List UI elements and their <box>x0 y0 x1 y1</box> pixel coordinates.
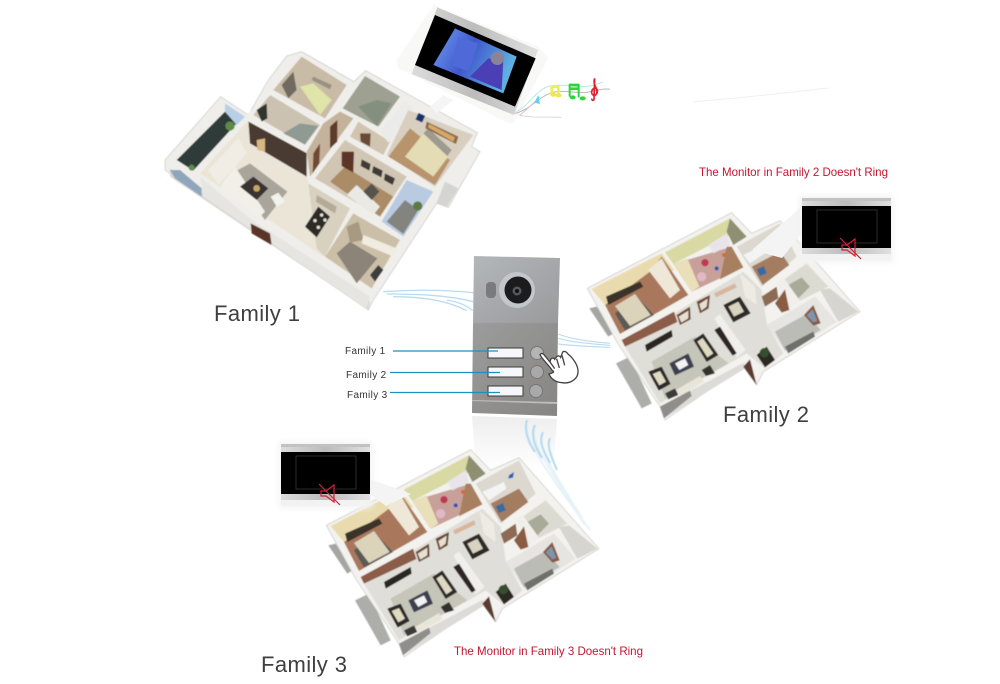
signal waves: left <box>383 290 473 311</box>
signal waves: down <box>526 420 590 530</box>
call buttons <box>530 346 544 398</box>
door station panel <box>472 256 560 416</box>
icon: pointing hand <box>540 351 578 383</box>
monitor: family 2 muted <box>752 196 893 262</box>
heading: family 1: Family 1 <box>214 301 300 326</box>
decorative faint line <box>693 88 828 102</box>
camera <box>499 272 535 308</box>
floor plan: family 2 <box>587 213 860 420</box>
text: family 1 button label: Family 1 <box>345 346 386 357</box>
text: family 3 button label: Family 3 <box>347 390 388 401</box>
heading: family 3: Family 3 <box>261 652 347 677</box>
callout: family 3 silent: The Monitor in Family 3 Doesn't Ring <box>454 644 643 658</box>
floor plan: family 3 <box>326 450 599 657</box>
monitor: family 1 ringing <box>397 5 548 123</box>
heading: family 2: Family 2 <box>723 402 809 427</box>
signal waves: right <box>558 334 610 347</box>
callout: family 2 silent: The Monitor in Family 2 Doesn't Ring <box>699 165 888 179</box>
floor plan: family 1 <box>165 52 480 310</box>
monitor: family 3 muted <box>279 442 411 508</box>
camera plate <box>473 256 560 323</box>
name plates <box>488 348 523 396</box>
speaker grille <box>486 282 496 298</box>
text: family 2 button label: Family 2 <box>346 370 387 381</box>
icon: music notes <box>515 78 610 117</box>
panel reflection <box>472 416 557 470</box>
button plate <box>472 323 558 416</box>
label lines <box>390 351 500 392</box>
